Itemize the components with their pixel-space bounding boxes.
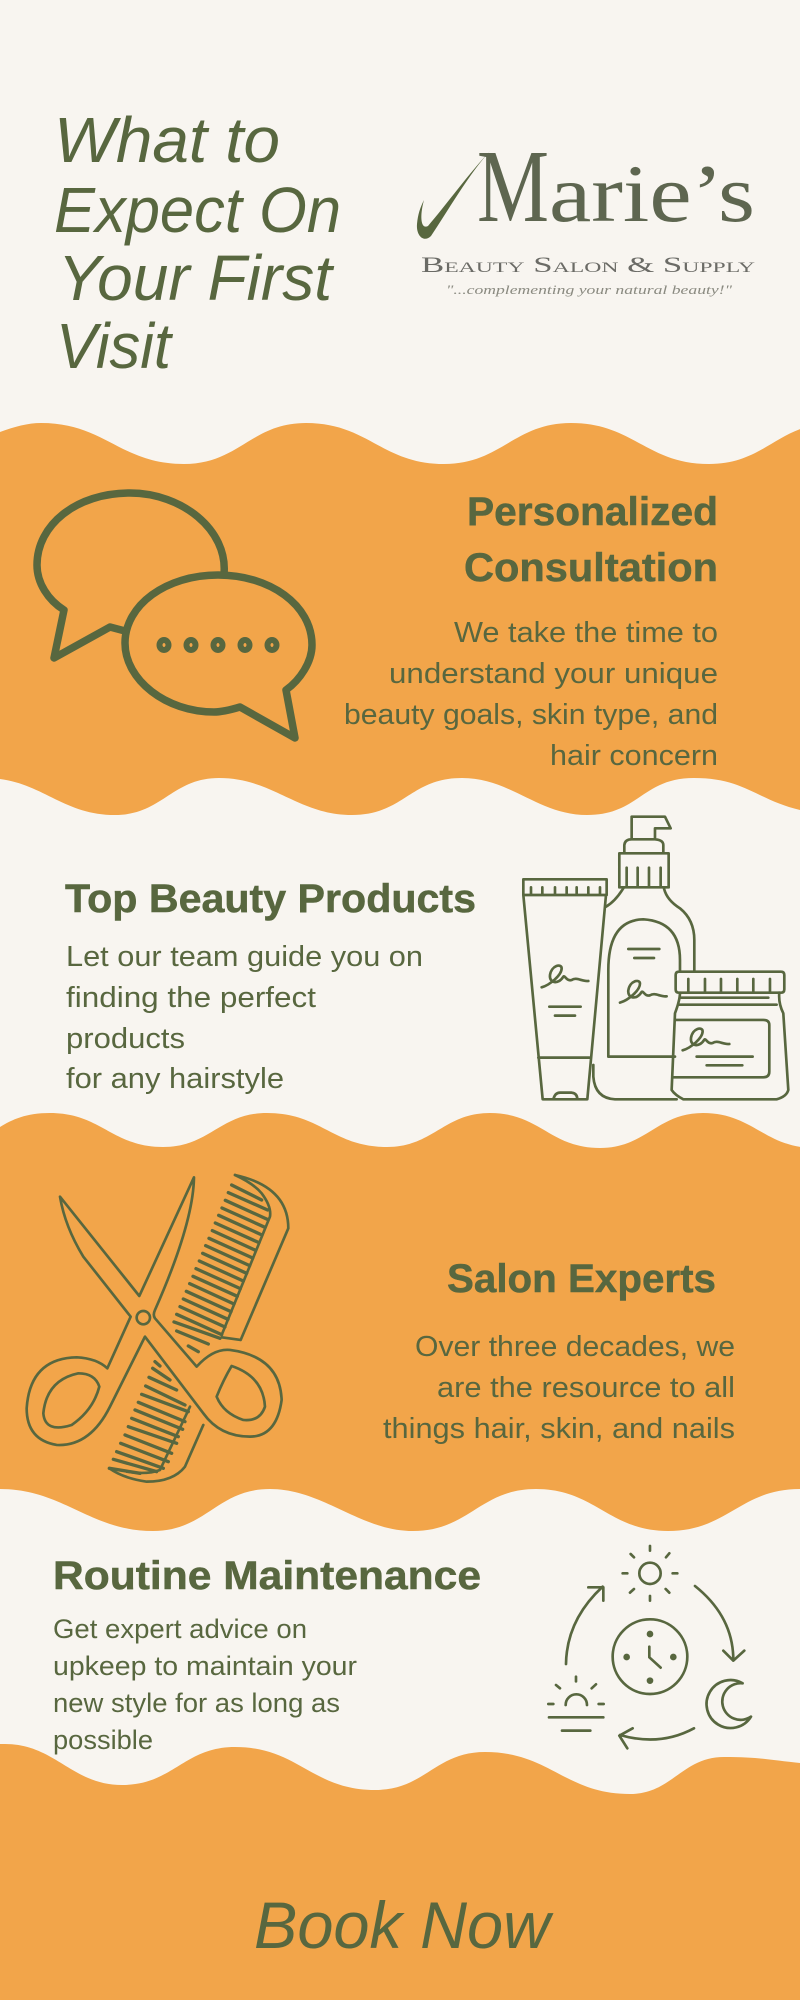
text: consultation description: beauty goals, skin type, and <box>344 699 718 731</box>
comb lower part <box>109 1362 203 1482</box>
title: Visit <box>56 310 173 382</box>
text: routine description <box>53 1614 357 1755</box>
text: products description: finding the perfect <box>66 982 316 1014</box>
text: consultation description: hair concern <box>550 740 718 772</box>
heading: Salon Experts: Salon Experts <box>447 1257 716 1301</box>
scissors finger holes <box>43 1366 265 1427</box>
sun <box>623 1546 677 1601</box>
arrow: sun to moon <box>695 1586 744 1661</box>
heading: Personalized Consultation: Personalized <box>467 490 718 534</box>
icon: daily routine cycle <box>548 1546 751 1748</box>
jar <box>672 972 788 1099</box>
text: products description: products <box>66 1023 185 1055</box>
title <box>54 104 341 382</box>
moon <box>707 1680 751 1728</box>
text: products description: Let our team guide you on <box>66 941 423 973</box>
logo: Marie's Beauty Salon & Supply <box>417 129 755 297</box>
tube <box>523 879 607 1099</box>
icon: scissors and comb <box>27 1175 288 1482</box>
text: routine description: upkeep to maintain your <box>53 1651 357 1681</box>
text: salon experts description <box>383 1331 735 1445</box>
text: salon experts description: things hair, skin, and nails <box>383 1413 735 1445</box>
call to action: Book Now: Book Now <box>254 1888 554 1962</box>
logo: Marie's Beauty Salon & Supply: M <box>477 129 549 244</box>
text: consultation description: understand your unique <box>389 658 718 690</box>
arrow: sunrise to sun <box>566 1587 603 1664</box>
band: consultation shape <box>0 423 800 815</box>
heading: Personalized Consultation: Consultation <box>464 546 718 590</box>
clock <box>613 1619 687 1694</box>
arrow: moon to sunrise <box>619 1728 694 1748</box>
heading: Personalized Consultation <box>464 490 718 590</box>
heading: Routine Maintenance: Routine Maintenance <box>53 1554 481 1598</box>
text: products description <box>66 941 423 1095</box>
comb upper part <box>174 1175 288 1352</box>
text: consultation description <box>344 617 718 772</box>
text: salon experts description: Over three decades, we <box>415 1331 735 1363</box>
text: salon experts description: are the resource to all <box>437 1372 735 1404</box>
text: consultation description: We take the time to <box>454 617 718 649</box>
title: Expect On <box>54 174 341 246</box>
text: routine description: possible <box>53 1725 153 1755</box>
logo: Marie's Beauty Salon & Supply: Beauty Salon & Supply <box>421 252 755 277</box>
text: products description: for any hairstyle <box>66 1063 284 1095</box>
scissors pivot <box>137 1311 150 1324</box>
icon: beauty products <box>523 817 788 1099</box>
sunrise <box>548 1677 604 1731</box>
heading: Top Beauty Products: Top Beauty Products <box>65 877 476 921</box>
text: routine description: new style for as long as <box>53 1688 340 1718</box>
text: routine description: Get expert advice on <box>53 1614 307 1644</box>
band: book now shape <box>0 1744 800 2000</box>
title: Your First <box>58 242 334 314</box>
logo: Marie's Beauty Salon & Supply: arie’s <box>549 148 755 239</box>
band: salon experts shape <box>0 1113 800 1531</box>
title: What to <box>54 104 280 176</box>
scissors outline <box>27 1177 282 1445</box>
icon: speech bubbles <box>37 493 312 738</box>
logo: Marie's Beauty Salon & Supply: "...complementing your natural beauty!" <box>446 282 733 297</box>
pump bottle <box>593 817 694 1099</box>
